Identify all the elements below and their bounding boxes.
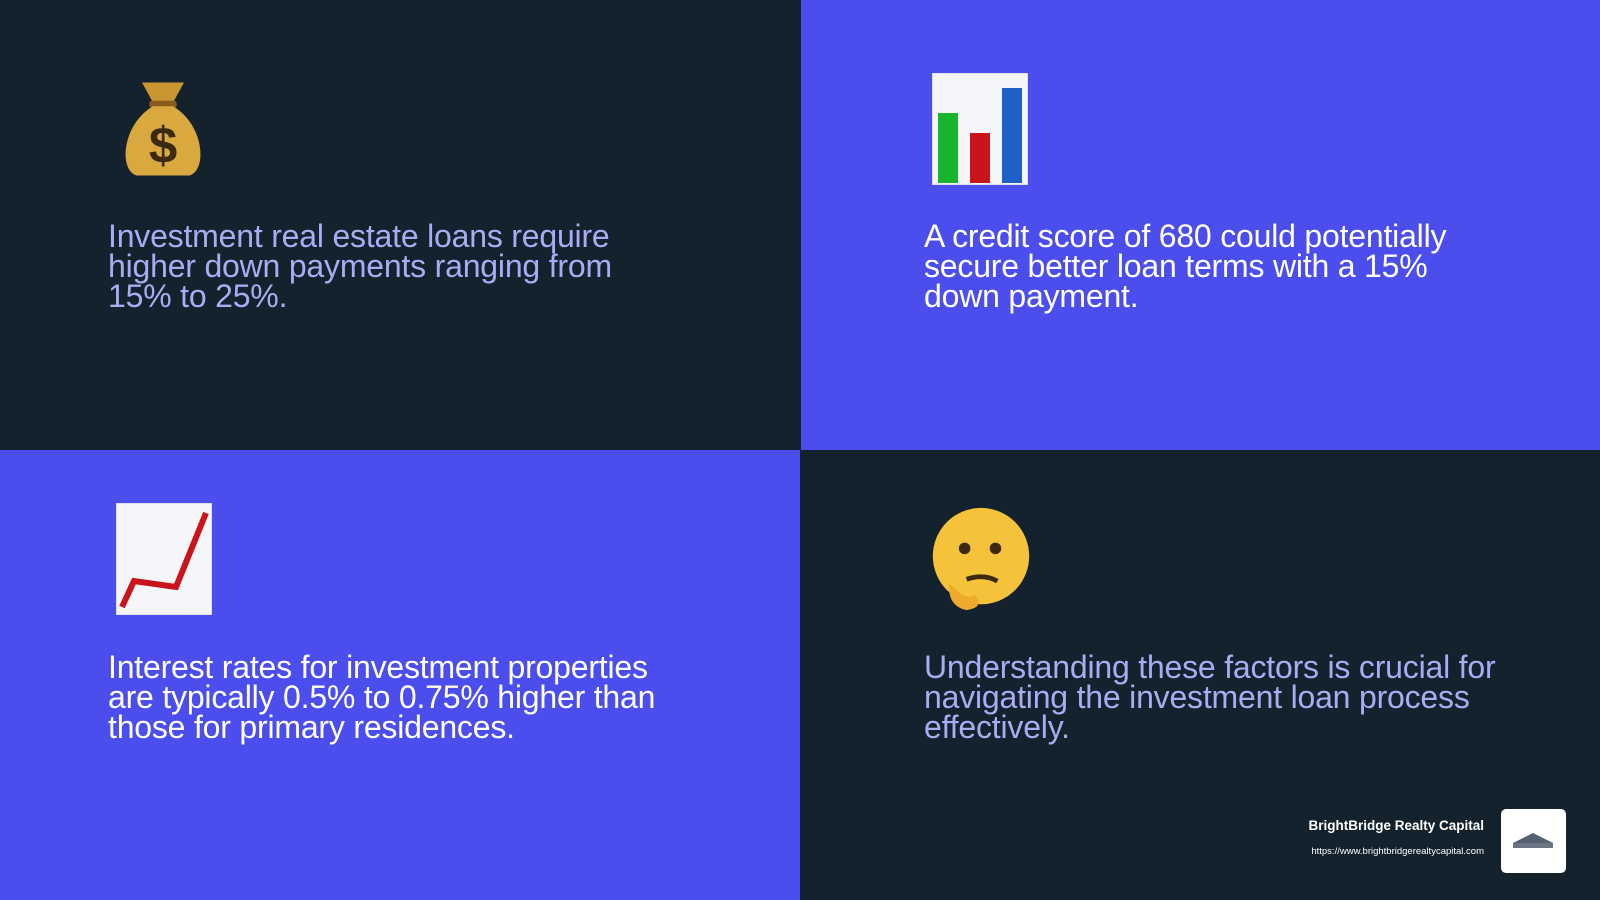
icon: money bag (126, 82, 200, 176)
text: down payments: higher down payments ranging from (108, 248, 612, 284)
panel: interest rates (0, 450, 800, 900)
text: interest rates (108, 649, 655, 745)
text: down payments: 15% to 25%. (108, 278, 287, 314)
text: interest rates: those for primary residences. (108, 709, 515, 745)
text: understanding (924, 649, 1496, 745)
text: credit score (924, 218, 1446, 314)
text: down payments: Investment real estate loans require (108, 218, 610, 254)
icon: thinking face (932, 508, 1030, 610)
text: understanding: Understanding these factors is crucial for (924, 649, 1495, 685)
text: understanding: effectively. (924, 709, 1070, 745)
text: credit score: secure better loan terms with a 15% (924, 248, 1427, 284)
brand block (1308, 809, 1566, 873)
panel: understanding (801, 450, 1600, 900)
text: understanding: navigating the investment loan process (924, 679, 1470, 715)
brand url: https://www.brightbridgerealtycapital.com (1311, 846, 1484, 857)
logo (1501, 809, 1566, 873)
icon: bar chart (932, 73, 1028, 185)
brand name: BrightBridge Realty Capital (1308, 818, 1484, 833)
text: interest rates: Interest rates for investment properties (108, 649, 648, 685)
panel: credit score (801, 0, 1600, 450)
text: credit score: A credit score of 680 could potentially (924, 218, 1446, 254)
text: interest rates: are typically 0.5% to 0.75% higher than (108, 679, 655, 715)
icon: rising chart (116, 503, 212, 615)
panel: down payments (0, 0, 800, 450)
text: credit score: down payment. (924, 278, 1138, 314)
text: down payments (108, 218, 612, 314)
icon: money bag: $ (149, 117, 177, 174)
